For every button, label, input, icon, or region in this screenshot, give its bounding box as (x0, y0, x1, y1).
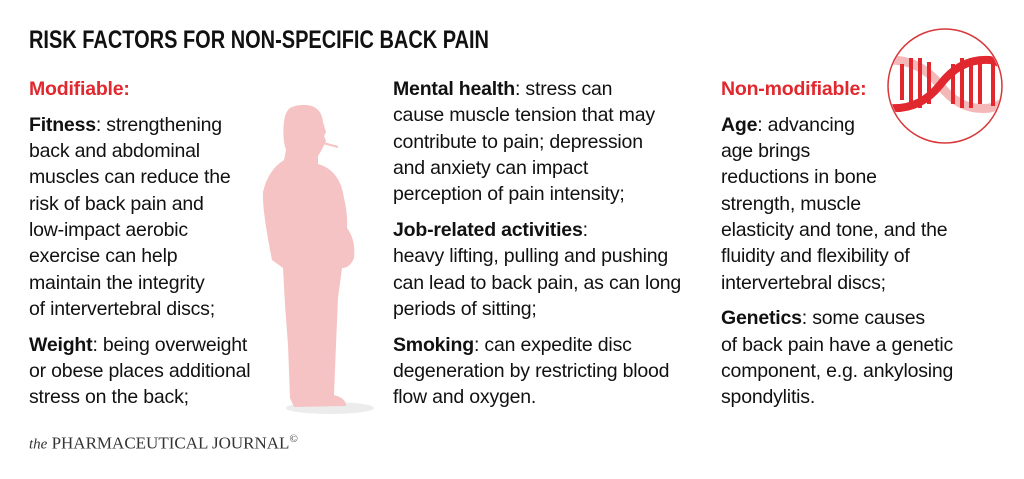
column: middle (393, 78, 681, 408)
text: smoking: Smoking: can expedite disc (393, 334, 632, 356)
text: fitness: back and abdominal (29, 140, 200, 162)
text: smoking: flow and oxygen. (393, 386, 536, 408)
text: age: elasticity and tone, and the (721, 219, 947, 241)
text: job-related (393, 219, 681, 320)
text: age: age brings (721, 140, 810, 162)
text: weight: stress on the back; (29, 386, 189, 408)
text: weight: Weight: being overweight (29, 334, 247, 356)
text: mental health: contribute to pain; depression (393, 131, 643, 153)
footer: logo: the PHARMACEUTICAL JOURNAL© (29, 433, 298, 453)
text: job-related: periods of sitting; (393, 298, 537, 320)
text: fitness: Fitness: strengthening (29, 114, 222, 136)
text: mental health (393, 78, 655, 205)
text: fitness: maintain the integrity (29, 272, 205, 294)
text: fitness: of intervertebral discs; (29, 298, 215, 320)
column: modifiable (29, 78, 250, 408)
text: mental health: perception of pain intensity; (393, 183, 625, 205)
text: mental health: and anxiety can impact (393, 157, 588, 179)
text: genetics (721, 307, 953, 408)
illustration: silhouette of man smoking (262, 104, 374, 414)
column: non-modifiable (721, 78, 953, 408)
text: smoking: degeneration by restricting blood (393, 360, 669, 382)
text: age: reductions in bone (721, 166, 877, 188)
text: fitness: risk of back pain and (29, 193, 204, 215)
text: genetics: spondylitis. (721, 386, 815, 408)
text: mental health: Mental health: stress can (393, 78, 612, 100)
text: fitness (29, 114, 231, 320)
heading: modifiable: Modifiable: (29, 78, 130, 100)
text: mental health: cause muscle tension that may (393, 104, 655, 126)
text: age: strength, muscle (721, 193, 861, 215)
text: job-related: Job-related activities: (393, 219, 588, 241)
text: age: fluidity and flexibility of (721, 245, 910, 267)
text: fitness: muscles can reduce the (29, 166, 231, 188)
text: weight: or obese places additional (29, 360, 250, 382)
text: smoking (393, 334, 669, 408)
heading: non-modifiable: Non-modifiable: (721, 78, 866, 100)
icon: DNA in circle (887, 28, 1003, 144)
text: weight (29, 334, 250, 408)
text: genetics: of back pain have a genetic (721, 334, 953, 356)
text: age: intervertebral discs; (721, 272, 886, 294)
text: job-related: heavy lifting, pulling and pushing (393, 245, 668, 267)
text: fitness: low-impact aerobic (29, 219, 188, 241)
text: fitness: exercise can help (29, 245, 177, 267)
text: job-related: can lead to back pain, as can long (393, 272, 681, 294)
text: genetics: Genetics: some causes (721, 307, 925, 329)
text: age (721, 114, 947, 294)
text: age: Age: advancing (721, 114, 855, 136)
text: genetics: component, e.g. ankylosing (721, 360, 953, 382)
